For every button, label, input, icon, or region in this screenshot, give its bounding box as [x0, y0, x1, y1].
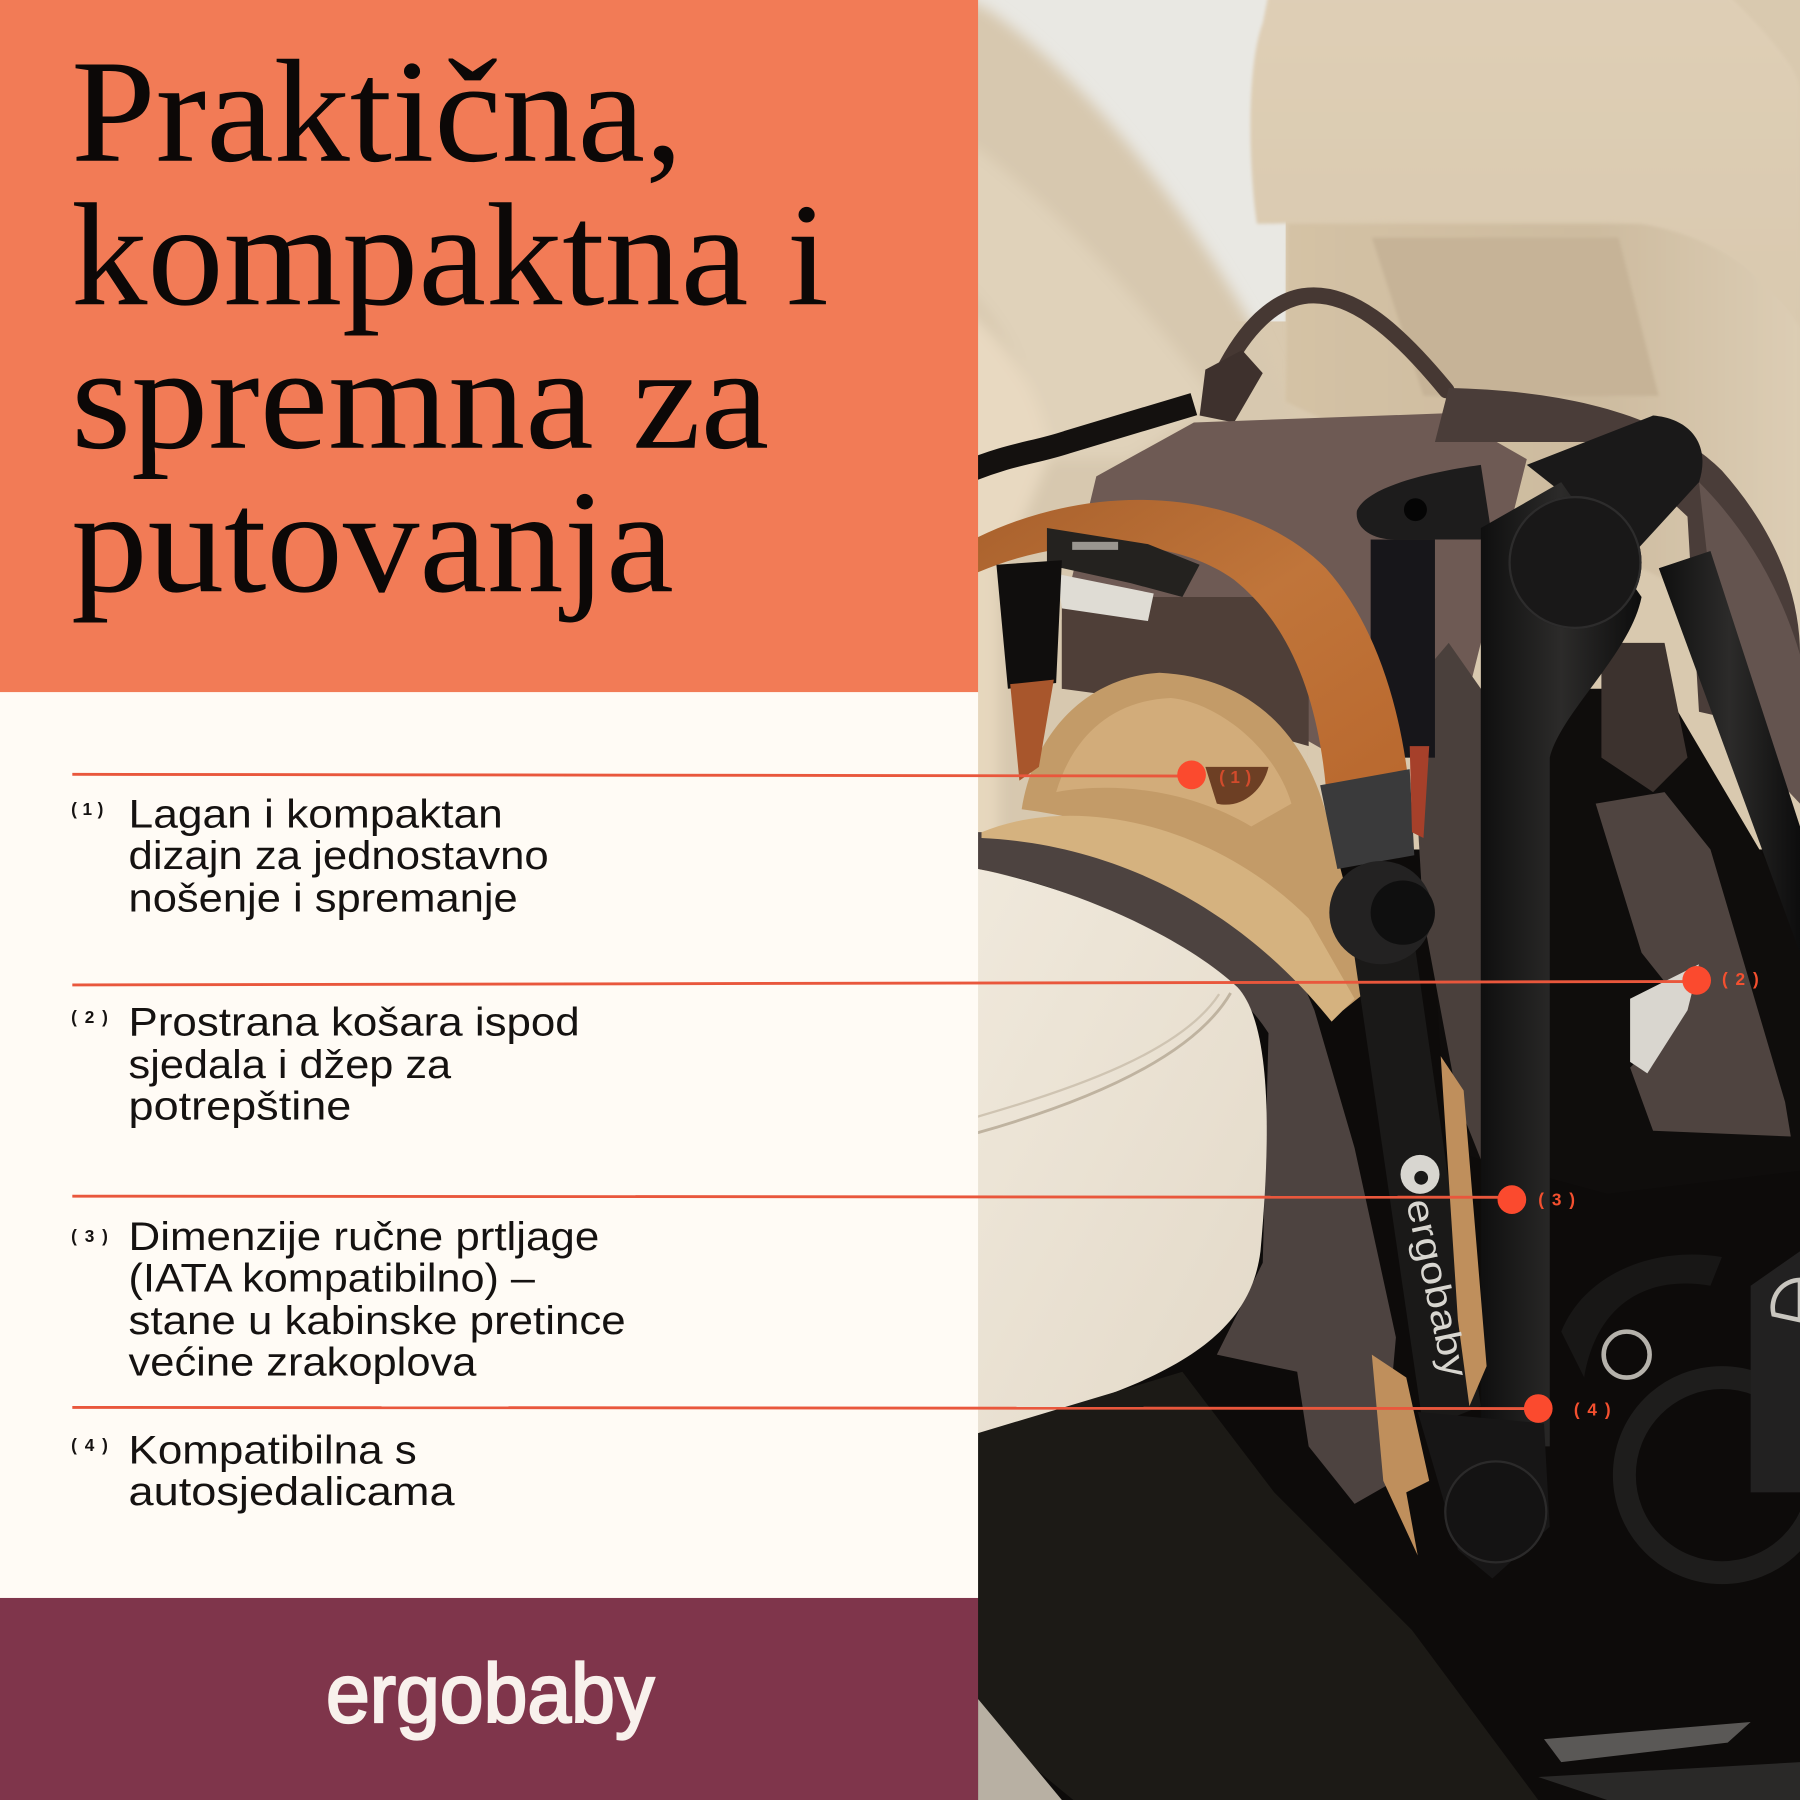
- callout 3: [72, 1185, 1575, 1214]
- dark interior: [1480, 688, 1760, 850]
- main black frame tube with hub: [1481, 482, 1642, 1446]
- leather handle: [964, 500, 1409, 788]
- knob on frame: [1329, 861, 1435, 964]
- feature 4 text: autosjedalicama: [129, 1469, 455, 1514]
- logo on tube: ergobaby: [1398, 1195, 1476, 1382]
- black label with white tab: [1047, 528, 1200, 621]
- stroller strap and fabric seat: [1062, 295, 1800, 804]
- white fabric flower: [1630, 964, 1699, 1073]
- feature 1 text: Lagan i kompaktan: [129, 792, 503, 837]
- callout 1: [72, 761, 1251, 789]
- title: Praktična,: [71, 30, 683, 193]
- feature 2 text: ( 2 ): [71, 1007, 108, 1027]
- feature 3 text: većine zrakoplova: [129, 1339, 477, 1384]
- callout 4: [72, 1394, 1611, 1423]
- photo: folded stroller in car: [918, 0, 1800, 1800]
- ivory car seat cushion: [964, 867, 1267, 1437]
- callout 2: ( 2 ): [1722, 969, 1759, 989]
- callout 1: ( 1 ): [1219, 767, 1251, 787]
- feature 2 text: sjedala i džep za: [129, 1042, 452, 1087]
- carpet: [964, 1372, 1538, 1800]
- left black post: [996, 560, 1062, 689]
- orange tube behind: [1410, 746, 1429, 838]
- feature 3 text: [71, 1214, 626, 1384]
- feature 3 text: ( 3 ): [71, 1226, 108, 1246]
- window background: [964, 0, 1286, 321]
- right car seat back: [1249, 0, 1666, 576]
- callout 4: ( 4 ): [1574, 1399, 1611, 1419]
- door sill: [978, 1699, 1062, 1800]
- title: putovanja: [71, 460, 674, 623]
- feature 2 text: potrepštine: [129, 1083, 351, 1128]
- grey knit fabric by tube: [1418, 643, 1481, 1160]
- logo on tube: [1400, 1154, 1463, 1376]
- hanging mesh bag: [1596, 792, 1791, 1136]
- feature 1 text: dizajn za jednostavno: [129, 833, 549, 878]
- title: kompaktna i: [71, 173, 829, 336]
- callout 2: [72, 966, 1759, 995]
- front frame tube: [1352, 941, 1481, 1429]
- floor plate: [1538, 1722, 1800, 1800]
- panel: title background: [0, 0, 978, 692]
- feature 1 text: ( 1 ): [71, 799, 103, 819]
- panel: footer: [0, 1598, 978, 1800]
- feature 3 text: Dimenzije ručne prtljage: [129, 1214, 599, 1259]
- feature 3 text: stane u kabinske pretince: [129, 1298, 626, 1343]
- feature 4 text: ( 4 ): [71, 1435, 108, 1455]
- tan strap: [1372, 1056, 1487, 1555]
- stroller wheels: [1561, 1251, 1800, 1573]
- lower hub: [1418, 1412, 1550, 1578]
- callout 3: ( 3 ): [1538, 1189, 1575, 1209]
- feature 1 text: [71, 792, 549, 920]
- feature 4 text: Kompatibilna s: [129, 1428, 417, 1473]
- handle collar: [1320, 769, 1414, 869]
- brown fabric right of hub: [1601, 643, 1688, 792]
- feature 3 text: (IATA kompatibilno) –: [129, 1255, 536, 1300]
- feature 2 text: Prostrana košara ispod: [129, 999, 580, 1044]
- logo: ergobaby: ergobaby: [326, 1646, 654, 1740]
- feature 4 text: [71, 1428, 455, 1514]
- grey draped fabric: [964, 832, 1396, 1504]
- title: [71, 30, 829, 623]
- left car seat: [978, 0, 1254, 883]
- folded black hub and arm: [1357, 416, 1800, 953]
- panel: feature list background: [0, 692, 978, 1598]
- black bar top left: [964, 404, 1194, 473]
- tan canopy: [982, 673, 1372, 1022]
- title: spremna za: [71, 317, 769, 480]
- feature 2 text: [71, 999, 580, 1128]
- feature 1 text: nošenje i spremanje: [129, 875, 518, 920]
